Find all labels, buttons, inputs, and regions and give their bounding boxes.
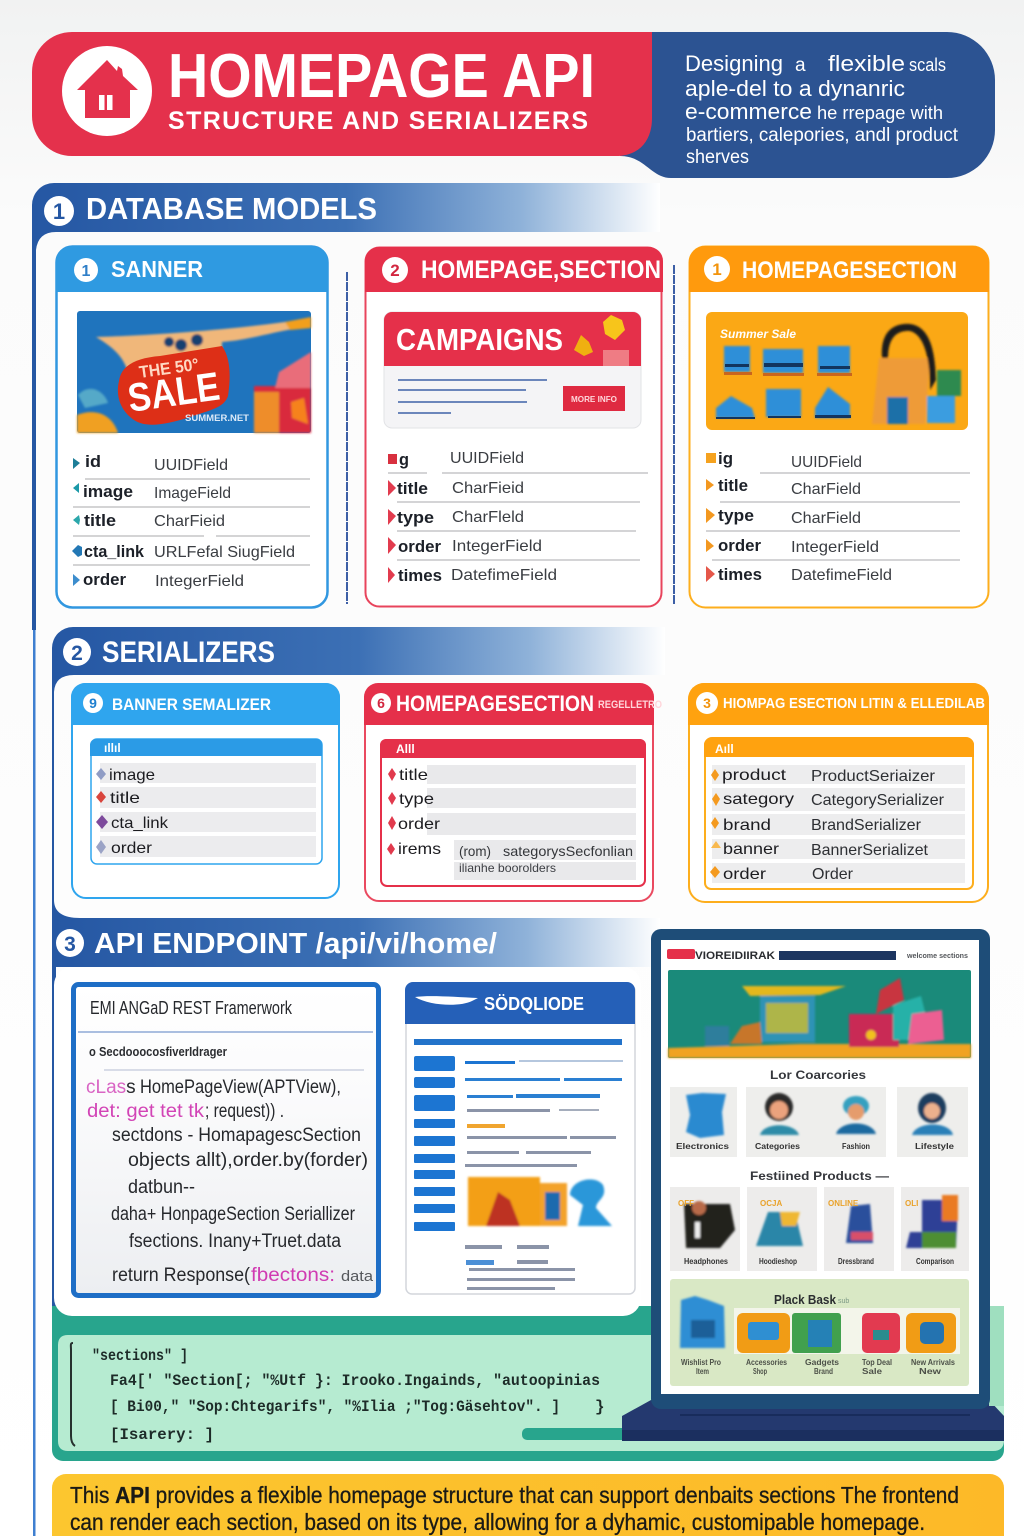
table: product section fields: type [718,506,754,525]
panel: JSON response [58,1335,1004,1451]
field rows: (rom) [459,843,491,859]
table: product section fields: CharField [791,510,861,527]
category tiles: Electronics [676,1142,730,1151]
product tiles [670,1187,969,1271]
description: aple-del to a dynanric [685,76,905,101]
field rows: brand [723,817,771,834]
panel: banner serializer: BANNER SEMALIZER [112,695,271,714]
product tiles: OFF [678,1199,694,1208]
field rows: image [109,767,155,784]
product tiles: Hoodieshop [759,1257,797,1266]
table: banner fields: ImageField [154,485,231,502]
panel: documentation page [405,982,635,1294]
product tiles: OCJA [760,1199,782,1208]
image: campaigns card: CAMPAIGNS [396,322,563,357]
code lines: fbectons: [251,1265,335,1286]
table: section fields: IntegerField [452,538,542,555]
header banner [32,32,995,178]
section heading bar: DATABASE MODELS [86,191,377,226]
heading: API endpoint: API ENDPOINT /api/vi/home/ [94,928,497,960]
code lines: daha+ HonpageSection Seriallizer [111,1204,356,1225]
panel: homepage section serializer: HOMEPAGESECTION [396,691,594,716]
featured products heading: Festiined Products — [750,1169,889,1183]
image: sale banner: THE 50° [138,355,200,382]
image: sale banner: SALE [125,365,222,421]
code lines: datbun-- [128,1177,195,1198]
panel: banner model: 1 [82,263,91,280]
panel: banner serializer: ıllıl [104,741,121,755]
section 2: serializers [52,627,989,930]
sidebar buttons [414,1056,455,1231]
image: product collection [706,312,968,430]
code lines: objects allt),order.by(forder) [128,1150,368,1171]
field rows: CategorySerializer [811,792,945,809]
field rows: cta_link [111,815,169,832]
code lines: ; request)) . [205,1101,284,1122]
image: campaigns card [384,312,641,428]
table: product section fields: DatefimeField [791,567,892,584]
site nav: VIOREIDIIRAK [695,950,775,962]
field rows: ProductSeriaizer [811,768,936,785]
laptop base [622,1400,1004,1441]
image: hero banner [668,970,971,1058]
promo block: Top Deal [862,1358,892,1367]
image: abstract artwork [468,1177,612,1226]
promo block: Wishlist Pro [681,1358,721,1367]
field rows: BannerSerializet [811,842,929,859]
product tiles: Comparison [916,1257,954,1266]
code lines: data [341,1268,374,1285]
table: banner fields: CharFieid [154,513,225,530]
table: product section fields: UUIDField [791,454,862,471]
section 3 background: API endpoint band and white panel [52,900,1004,1461]
description: a [795,55,806,76]
code lines: return Response( [112,1265,251,1286]
promo block: Sale [862,1367,883,1376]
promo block: sub [838,1298,849,1305]
field rows: title [399,767,428,784]
category tiles: Fashion [842,1142,870,1151]
promo block: Shop [753,1367,767,1376]
field rows: product [722,767,787,784]
image: sale banner: SUMMER.NET [185,413,250,423]
table: banner fields: UUIDField [154,457,228,474]
field rows [710,765,965,883]
table: section fields: times [398,566,442,585]
table: product section fields: order [718,536,761,555]
heading: API endpoint: 3 [64,933,76,956]
table: banner fields: cta_link [84,542,145,561]
section heading bar: 2 [71,642,83,665]
table: section fields: type [397,508,434,527]
panel: banner model [56,246,328,608]
panel: homepage section items serializer [688,683,989,902]
panel: homepage section items serializer: Aıll [715,742,734,756]
promo block: Brand [814,1367,833,1376]
table: banner fields [72,452,310,590]
promo block: Accessories [746,1358,787,1367]
categories heading: Lor Coarcories [770,1068,866,1082]
field rows [387,765,636,880]
field rows: order [111,840,153,857]
panel: JSON response: [Isarery: ] [110,1426,214,1444]
description: e-commerce [685,99,812,124]
panel: JSON response: } [595,1398,605,1416]
panel: JSON response: [ Bi00," "Sop:Chtegarifs", "%Ilia ;"Tog:Gäsehtov". ] [110,1398,560,1416]
table: banner fields: image [83,482,133,501]
panel: homepage section serializer: REGELLETRO [598,699,662,711]
section heading bar [32,183,660,630]
table: banner fields: IntegerField [155,573,244,590]
panel: homepage section campaigns model: HOMEPAGE,SECTION [421,256,661,284]
code lines [86,1077,374,1286]
field rows [96,763,316,857]
description: sherves [686,147,749,168]
laptop frame [651,929,990,1409]
table: product section fields [706,449,970,584]
panel: homepage section products model: HOMEPAGESECTION [742,257,957,284]
panel: homepage section products model: 1 [712,260,722,279]
panel: REST framework code [74,984,378,1296]
description: he rrepage with [817,103,943,123]
panel: REST framework code: o SecdooocosfiverIdrager [89,1044,227,1059]
table: section fields: title [397,479,428,498]
panel: homepage section campaigns model: 2 [390,261,400,280]
image: sale banner [77,311,311,433]
category tiles: Lifestyle [915,1142,955,1151]
code lines: cLass [86,1077,136,1098]
product tiles: Headphones [684,1257,728,1266]
footer callout: This API provides a flexible homepage structure that can support denbaits sections The frontend [70,1482,959,1508]
panel: REST framework code: EMI ANGaD REST Framerwork [90,998,293,1018]
field rows: ilianhe boorolders [459,861,556,875]
description: bartiers, calepories, andl product [686,125,959,146]
footer callout: can render each section, based on its type, allowing for a dyhamic, customipable homepage. [70,1509,925,1535]
description [685,51,959,168]
table: product section fields: IntegerField [791,539,879,556]
field rows: title [110,790,140,807]
table: section fields: g [399,450,409,469]
code lines: fsections. Inany+Truet.data [129,1231,341,1252]
panel: banner model: SANNER [111,256,203,282]
category tiles [670,1087,968,1157]
subtitle: STRUCTURE AND SERIALIZERS [168,107,588,135]
promo block: New [919,1367,942,1376]
text bars [465,1060,623,1290]
section heading bar [52,627,665,930]
table: section fields: DatefimeField [451,567,557,584]
table: section fields: order [398,537,441,556]
table: section fields: UUIDField [450,450,524,467]
panel: title background [32,32,652,156]
description: Designing [685,51,783,76]
promo block: New Arrivals [911,1358,956,1367]
field rows: order [723,866,767,883]
panel: homepage section products model [689,246,989,608]
image: campaigns card: MORE INFO [571,395,617,404]
product tiles: Dressbrand [838,1257,874,1266]
code lines: det: get tet tk [87,1101,205,1122]
site nav: welcome sections [906,953,968,960]
promo block: Item [696,1367,709,1376]
panel: homepage section serializer: Alll [396,742,415,756]
title: HOMEPAGE API [168,42,595,111]
panel: homepage section serializer: 6 [377,695,385,711]
table: section fields [388,450,648,585]
panel: homepage section serializer [364,683,662,901]
section 1: database models [32,183,989,630]
section heading bar: SERIALIZERS [102,636,275,669]
table: banner fields: order [83,570,126,589]
product tiles: ONLINE [828,1199,859,1208]
table: section fields: CharFieid [452,480,524,497]
promo block [670,1279,969,1386]
field rows: BrandSerializer [811,817,922,834]
table: banner fields: id [85,452,101,471]
category tiles: Categories [755,1142,801,1151]
description: scals [909,55,946,75]
panel: JSON response: Fa4[' "Section[; "%Utf }: Irooko.Ingainds, "autoopinias [110,1372,600,1390]
code lines: HomePageView(APTView), [140,1077,341,1098]
field rows: order [398,816,441,833]
code lines: sectdons - HomapagescSection [112,1125,361,1146]
field rows: sategory [723,791,794,808]
panel: documentation page: SÖDQLIODE [484,994,584,1014]
site nav [667,949,968,962]
field rows: type [399,791,434,808]
footer callout [52,1474,1004,1536]
field rows: sategorysSecfonlian [503,843,633,859]
table: product section fields: title [718,476,748,495]
panel: homepage preview laptop [622,929,1004,1441]
table: banner fields: title [84,511,116,530]
table: product section fields: CharField [791,481,861,498]
icon: house [62,46,152,136]
field rows: banner [723,841,780,858]
description: flexible [828,51,905,76]
panel: banner serializer: 9 [89,695,97,711]
image: product collection: Summer Sale [720,327,796,341]
panel: homepage section items serializer: 3 [703,695,711,711]
table: section fields: CharFleld [452,509,524,526]
field rows: irems [398,841,441,858]
table: product section fields: ig [718,449,733,468]
section heading bar: 1 [53,199,65,224]
promo block: Gadgets [805,1358,840,1367]
panel: homepage section items serializer: HIOMPAG ESECTION LITIN & ELLEDILAB [723,695,985,712]
panel: banner serializer [71,683,340,898]
table: product section fields: times [718,565,762,584]
panel: homepage section campaigns model [365,247,663,606]
field rows: Order [812,866,854,883]
panel: description background [620,32,995,178]
table: banner fields: URLFefal SiugField [154,544,295,561]
promo block: Plack Bask [774,1292,837,1307]
panel: JSON response: "sections" ] [92,1347,188,1365]
product tiles: OLI [905,1199,918,1208]
